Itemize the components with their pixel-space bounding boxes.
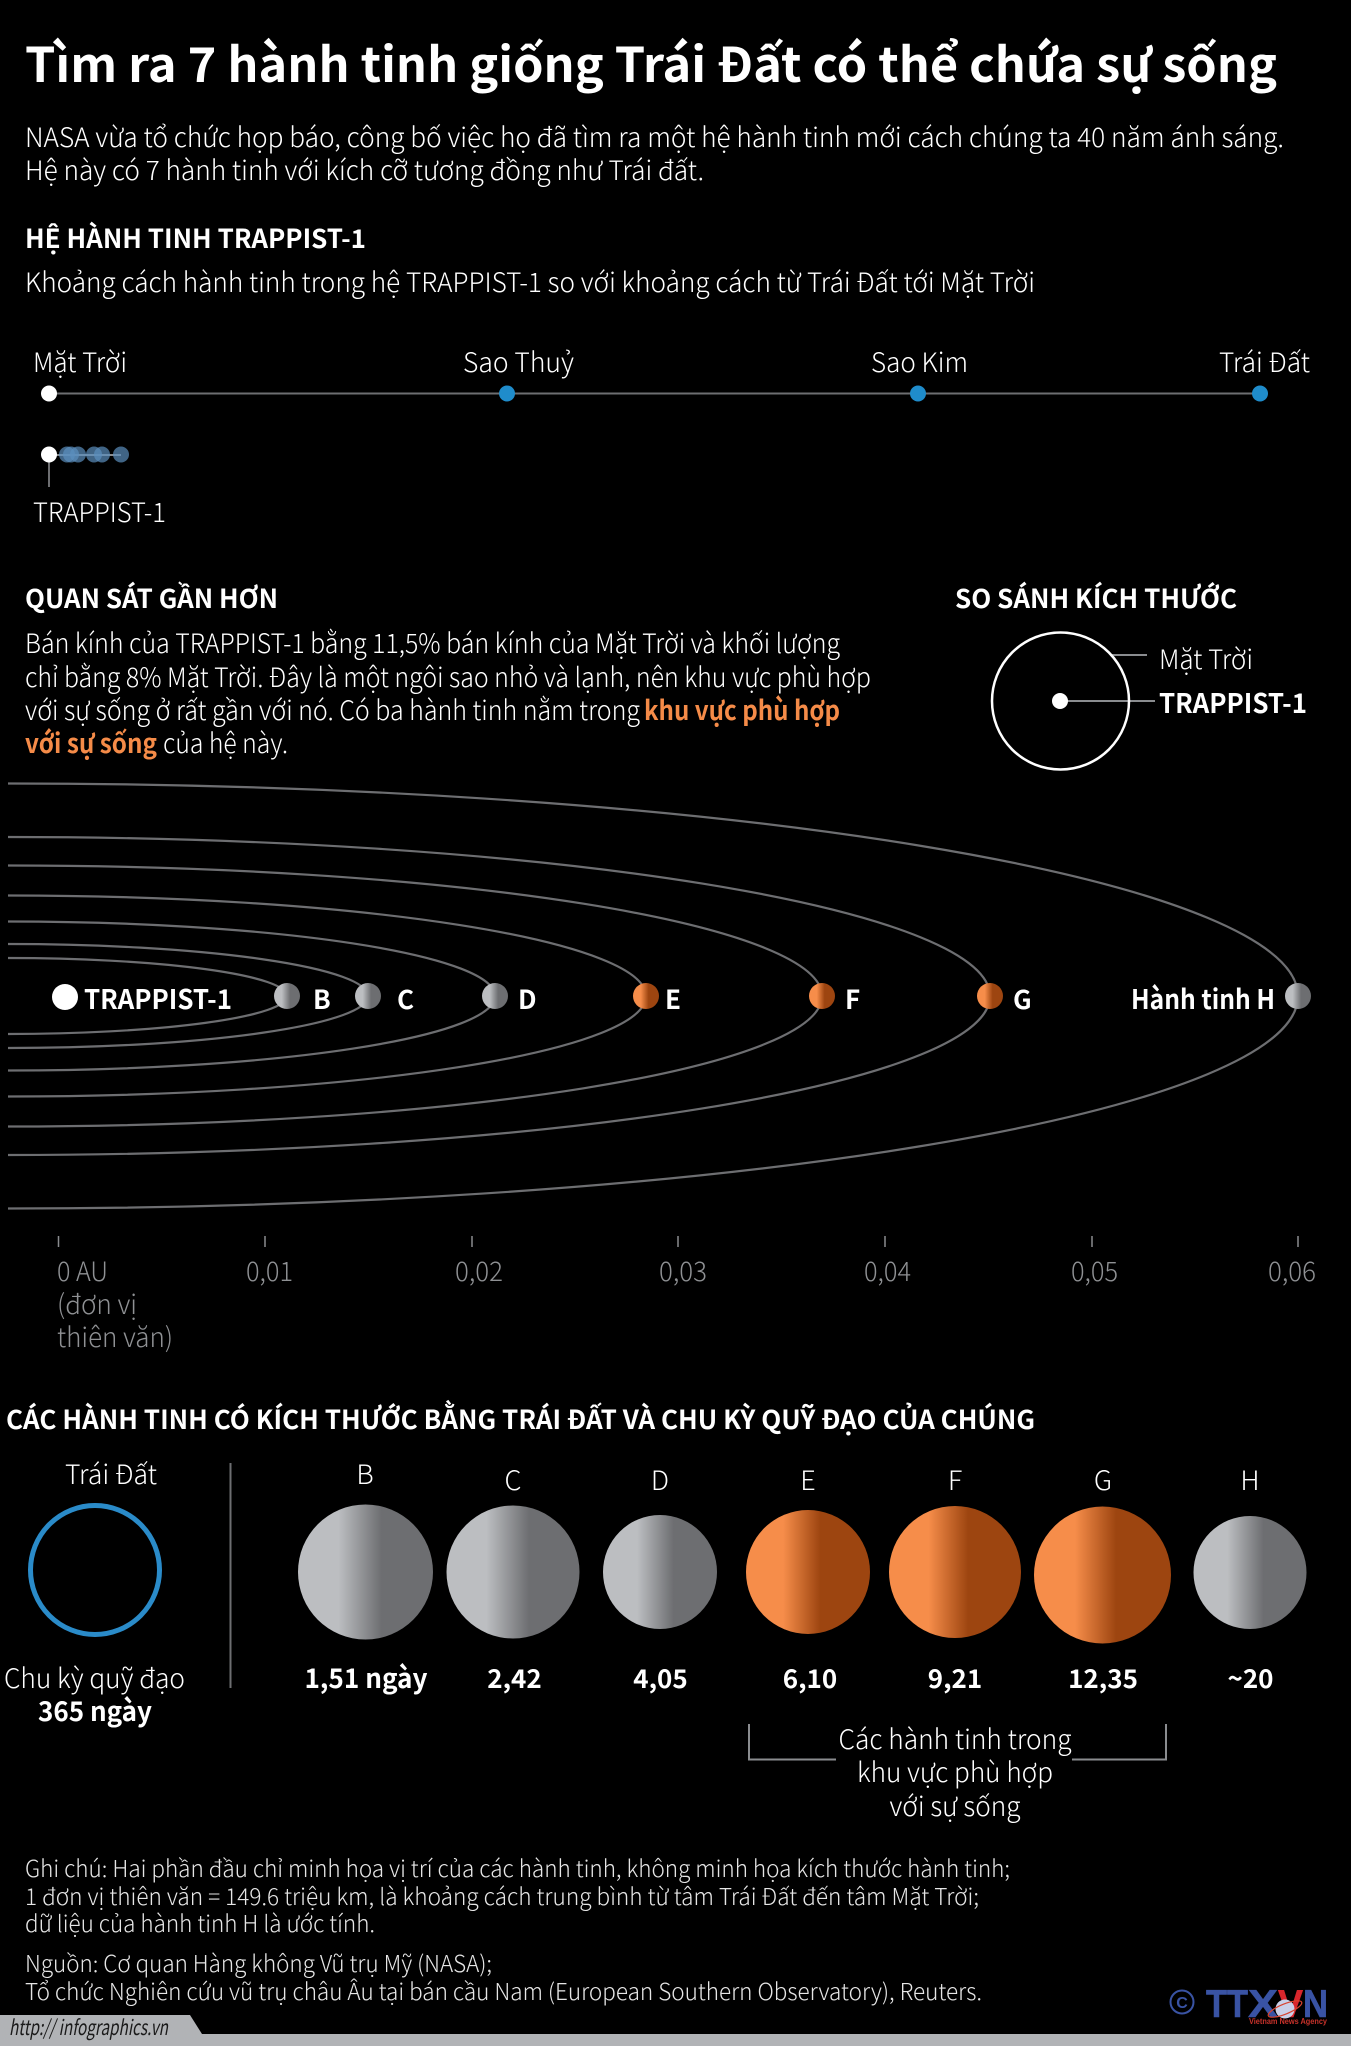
earth reference — [4, 1453, 185, 1729]
solar system distance line: Sao Thuỷ — [463, 341, 574, 380]
TRAPPIST-1 distance line — [33, 446, 166, 530]
orbit planet labels: G — [1013, 980, 1032, 1017]
logo: TTXVN: T — [1227, 1983, 1248, 2026]
size comparison diagram: Mặt Trời — [1159, 638, 1253, 677]
orbit planet labels — [313, 978, 1275, 1017]
planet C — [446, 1459, 580, 1696]
title: Tìm ra 7 hành tinh giống Trái Đất có thể chứa sự sống — [25, 26, 1277, 96]
distance axis: 0,05 — [1071, 1250, 1118, 1289]
orbit planet labels: D — [518, 980, 537, 1017]
closer look paragraph: Bán kính của TRAPPIST-1 bằng 11,5% bán kính của Mặt Trời và khối lượng — [25, 622, 840, 661]
intro text — [25, 116, 1284, 188]
planet F: F — [948, 1459, 962, 1498]
closer look paragraph: của hệ này. — [163, 722, 288, 761]
distance axis — [57, 1236, 1316, 1355]
planet H: ~20 — [1227, 1659, 1274, 1696]
closer look paragraph — [25, 622, 871, 761]
logo: TTXVN: Vietnam News Agency — [1249, 2017, 1328, 2026]
orbit diagram — [8, 784, 1311, 1208]
planet G: 12,35 — [1068, 1659, 1138, 1696]
planet G — [1034, 1459, 1171, 1696]
planet G: G — [1094, 1459, 1112, 1498]
logo: TTXVN: T — [1206, 1983, 1227, 2026]
distance axis: thiên văn) — [57, 1316, 173, 1355]
distance axis: 0,06 — [1268, 1250, 1316, 1289]
logo: TTXVN: V — [1278, 1983, 1303, 2026]
orbit planet labels: B — [313, 980, 331, 1017]
notes: dữ liệu của hành tinh H là ước tính. — [25, 1905, 375, 1939]
distance axis: 0,04 — [864, 1250, 911, 1289]
planet F: 9,21 — [928, 1659, 982, 1696]
earth reference: 365 ngày — [38, 1690, 152, 1729]
planet F — [889, 1459, 1021, 1696]
footer bar: http:// infographics.vn — [9, 2012, 169, 2042]
logo: TTXVN: C — [1176, 1995, 1188, 2012]
logo: TTXVN: N — [1303, 1983, 1328, 2026]
closer look paragraph: với sự sống — [25, 722, 157, 761]
logo: TTXVN: X — [1248, 1983, 1278, 2026]
solar system distance line: Mặt Trời — [33, 341, 127, 380]
size comparison diagram: TRAPPIST-1 — [1159, 682, 1307, 721]
planet E — [746, 1459, 870, 1696]
sources — [25, 1945, 982, 2007]
planet E: 6,10 — [783, 1659, 837, 1696]
planet C: C — [505, 1459, 521, 1498]
planet D: D — [651, 1459, 669, 1498]
logo: TTXVN — [1170, 1983, 1328, 2026]
planet H — [1194, 1459, 1306, 1696]
notes: 1 đơn vị thiên văn = 149.6 triệu km, là khoảng cách trung bình từ tâm Trái Đất đến tâm Mặt Trời; — [25, 1878, 979, 1912]
star: TRAPPIST-1: TRAPPIST-1 — [84, 978, 232, 1017]
closer look paragraph: khu vực phù hợp — [644, 689, 840, 728]
earth reference: Trái Đất — [65, 1453, 157, 1492]
distance axis: 0,02 — [455, 1250, 503, 1289]
habitable zone bracket: Các hành tinh trong — [838, 1718, 1072, 1757]
sources: Tổ chức Nghiên cứu vũ trụ châu Âu tại bán cầu Nam (European Southern Observatory), Reuters. — [25, 1973, 982, 2007]
distance axis: 0 AU — [57, 1250, 108, 1289]
sources: Nguồn: Cơ quan Hàng không Vũ trụ Mỹ (NASA); — [25, 1945, 492, 1979]
solar system distance line: Sao Kim — [871, 341, 968, 380]
footer bar — [0, 2012, 1351, 2046]
orbit planets — [274, 983, 1311, 1009]
planet B: B — [356, 1453, 374, 1492]
planet D: 4,05 — [633, 1659, 688, 1696]
closer look paragraph: chỉ bằng 8% Mặt Trời. Đây là một ngôi sao nhỏ và lạnh, nên khu vực phù hợp — [25, 656, 871, 695]
distance axis: (đơn vị — [57, 1283, 137, 1322]
habitable zone bracket: khu vực phù hợp — [857, 1751, 1053, 1790]
heading: size comparison: SO SÁNH KÍCH THƯỚC — [955, 579, 1237, 616]
planet H: H — [1240, 1459, 1260, 1498]
planet D — [603, 1459, 717, 1696]
notes — [25, 1850, 1010, 1939]
heading: TRAPPIST-1 system: HỆ HÀNH TINH TRAPPIST-1 — [25, 219, 366, 256]
intro text: NASA vừa tổ chức họp báo, công bố việc họ đã tìm ra một hệ hành tinh mới cách chúng ta 40 năm ánh sáng. — [25, 116, 1284, 155]
habitable zone bracket — [749, 1718, 1166, 1824]
earth reference: Chu kỳ quỹ đạo — [4, 1657, 185, 1696]
orbit planet labels: C — [397, 980, 414, 1017]
habitable zone bracket: với sự sống — [890, 1785, 1021, 1824]
TRAPPIST-1 distance line: TRAPPIST-1 — [33, 491, 166, 530]
notes: Ghi chú: Hai phần đầu chỉ minh họa vị trí của các hành tinh, không minh họa kích thước hành tinh; — [25, 1850, 1010, 1884]
planet E: E — [800, 1459, 816, 1498]
distance axis: 0,01 — [246, 1250, 293, 1289]
orbit planet labels: F — [845, 980, 860, 1017]
solar system distance line: Trái Đất — [1219, 341, 1310, 380]
closer look paragraph: với sự sống ở rất gần với nó. Có ba hành tinh nằm trong — [25, 689, 640, 728]
planet C: 2,42 — [487, 1659, 542, 1696]
intro text: Hệ này có 7 hành tinh với kích cỡ tương đồng như Trái đất. — [25, 149, 704, 188]
orbit planet labels: E — [665, 980, 681, 1017]
heading: earth-sized planets: CÁC HÀNH TINH CÓ KÍCH THƯỚC BẰNG TRÁI ĐẤT VÀ CHU KỲ QUỸ ĐẠO CỦA CHÚNG — [6, 1400, 1035, 1437]
size comparison diagram — [992, 632, 1307, 770]
planet B — [298, 1453, 433, 1696]
subtitle: distance comparison: Khoảng cách hành tinh trong hệ TRAPPIST-1 so với khoảng cách từ Trái Đất tới Mặt Trời — [25, 261, 1035, 300]
distance axis: 0,03 — [659, 1250, 707, 1289]
orbit planet labels: Hành tinh H — [1131, 978, 1275, 1017]
planet B: 1,51 ngày — [304, 1657, 428, 1696]
solar system distance line — [33, 341, 1310, 402]
heading: closer look: QUAN SÁT GẦN HƠN — [25, 579, 278, 616]
